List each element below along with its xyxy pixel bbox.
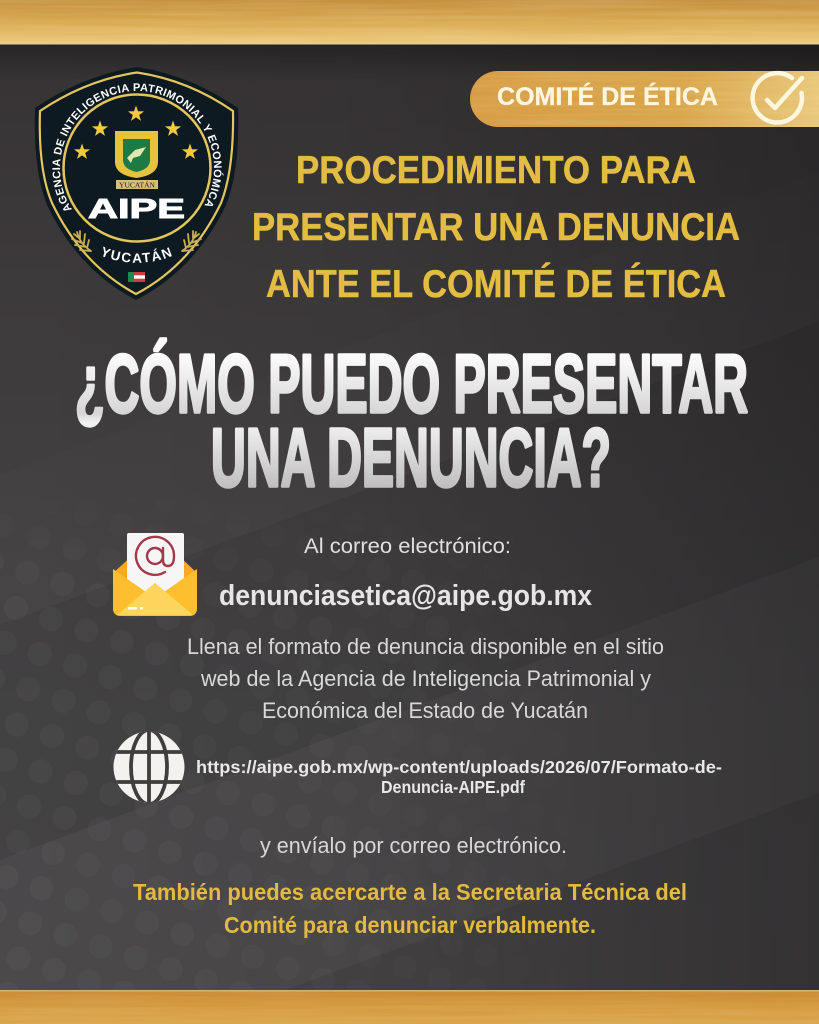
email address: denunciasetica@aipe.gob.mx xyxy=(219,580,592,612)
title: ANTE EL COMITÉ DE ÉTICA xyxy=(266,262,726,306)
top gold band xyxy=(0,0,819,44)
instructions paragraph: Económica del Estado de Yucatán xyxy=(262,698,588,723)
bottom gold band xyxy=(0,990,819,1024)
logo: AIPE shield xyxy=(34,67,238,300)
stars xyxy=(74,106,198,159)
icon: check circle xyxy=(753,73,802,123)
title xyxy=(252,149,740,306)
Yucatan arc text: YUCATÁN xyxy=(103,246,172,263)
send by email note: y envíalo por correo electrónico. xyxy=(260,833,567,858)
flag xyxy=(128,272,145,282)
coat of arms: YUCATÁN xyxy=(119,182,155,190)
icon: globe xyxy=(114,732,184,802)
email label: Al correo electrónico: xyxy=(304,534,511,558)
title: PROCEDIMIENTO PARA xyxy=(296,149,696,192)
form URL: Denuncia-AIPE.pdf xyxy=(381,777,525,797)
laurels xyxy=(72,231,201,251)
instructions paragraph: Llena el formato de denuncia disponible en el sitio xyxy=(187,634,664,659)
verbal complaint note: También puedes acercarte a la Secretaria Técnica del xyxy=(133,879,687,905)
gold ring xyxy=(64,94,210,242)
instructions paragraph: web de la Agencia de Inteligencia Patrimonial y xyxy=(200,666,651,691)
form URL: https://aipe.gob.mx/wp-content/uploads/2026/07/Formato-de- xyxy=(196,757,722,777)
coat of arms xyxy=(115,131,158,190)
instructions paragraph xyxy=(187,634,664,723)
shield body xyxy=(35,67,238,300)
at sign xyxy=(136,537,174,575)
icon: open envelope xyxy=(113,533,197,616)
form URL xyxy=(196,757,722,797)
title: PRESENTAR UNA DENUNCIA xyxy=(252,206,740,249)
badge: comité de ética xyxy=(470,71,819,127)
verbal complaint note xyxy=(133,879,687,938)
ring text: AGENCIA DE INTELIGENCIA PATRIMONIAL Y ECONÓMICA xyxy=(52,83,224,211)
main question heading xyxy=(75,337,748,504)
verbal complaint note: Comité para denunciar verbalmente. xyxy=(224,912,596,938)
badge: comité de ética: COMITÉ DE ÉTICA xyxy=(497,82,718,111)
AIPE wordmark: AIPE xyxy=(88,193,185,224)
